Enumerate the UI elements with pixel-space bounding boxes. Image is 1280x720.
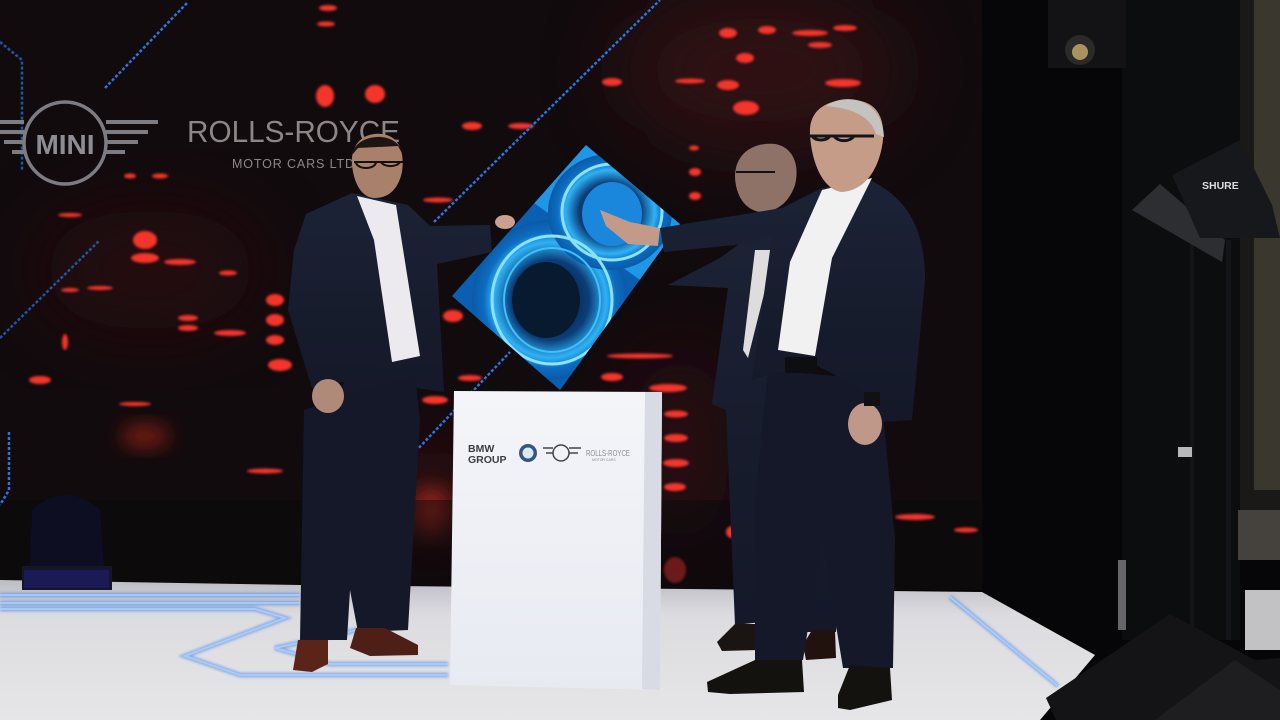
trousers xyxy=(755,370,895,668)
plinth logo: Rolls-Royce xyxy=(586,448,630,462)
right curtain area xyxy=(982,0,1280,720)
person: right front xyxy=(600,99,925,710)
blue diagonal light lines xyxy=(0,0,660,505)
logo: MINI xyxy=(0,102,158,184)
plinth logo: Rolls-Royce: MOTOR CARS xyxy=(592,458,616,462)
head: left xyxy=(352,134,403,198)
plinth logo: Rolls-Royce: ROLLS-ROYCE xyxy=(586,448,630,458)
logo: Rolls-Royce: MOTOR CARS LTD xyxy=(232,157,354,171)
jacket xyxy=(660,180,925,422)
plinth logo: BMW Group: GROUP xyxy=(468,454,507,466)
logo wordmark: MINI: MINI xyxy=(35,129,95,160)
head: right xyxy=(810,100,883,192)
plinth logo: BMW Group xyxy=(468,443,507,466)
spotlight xyxy=(1048,0,1126,68)
red lights on wall xyxy=(29,5,978,583)
shirt xyxy=(778,178,872,356)
shoes xyxy=(293,640,328,672)
floor xyxy=(0,580,1095,720)
hand on cube xyxy=(600,210,660,246)
shoes xyxy=(717,624,758,651)
plinth logo: MINI xyxy=(543,445,581,461)
jacket xyxy=(288,193,492,412)
shoes xyxy=(707,660,804,694)
head: centre back xyxy=(735,144,797,212)
diamond LED cube xyxy=(452,145,680,390)
shirt xyxy=(357,196,420,362)
person: left xyxy=(288,134,515,672)
floor monitor speaker xyxy=(1046,614,1280,720)
microphone receivers xyxy=(1132,140,1280,640)
led wall xyxy=(0,0,982,590)
logo: Rolls-Royce: ROLLS-ROYCE xyxy=(187,114,400,149)
plinth xyxy=(450,391,662,690)
person: centre back xyxy=(668,144,838,660)
logo: Rolls-Royce xyxy=(187,114,400,171)
trousers xyxy=(300,375,420,640)
uplight fixture xyxy=(22,495,112,590)
hand xyxy=(312,379,344,413)
plinth logo: BMW roundel xyxy=(519,444,537,462)
plinth logo: BMW Group: BMW xyxy=(468,443,494,455)
receiver brand: SHURE xyxy=(1202,180,1239,192)
floor light strips xyxy=(0,595,1058,686)
